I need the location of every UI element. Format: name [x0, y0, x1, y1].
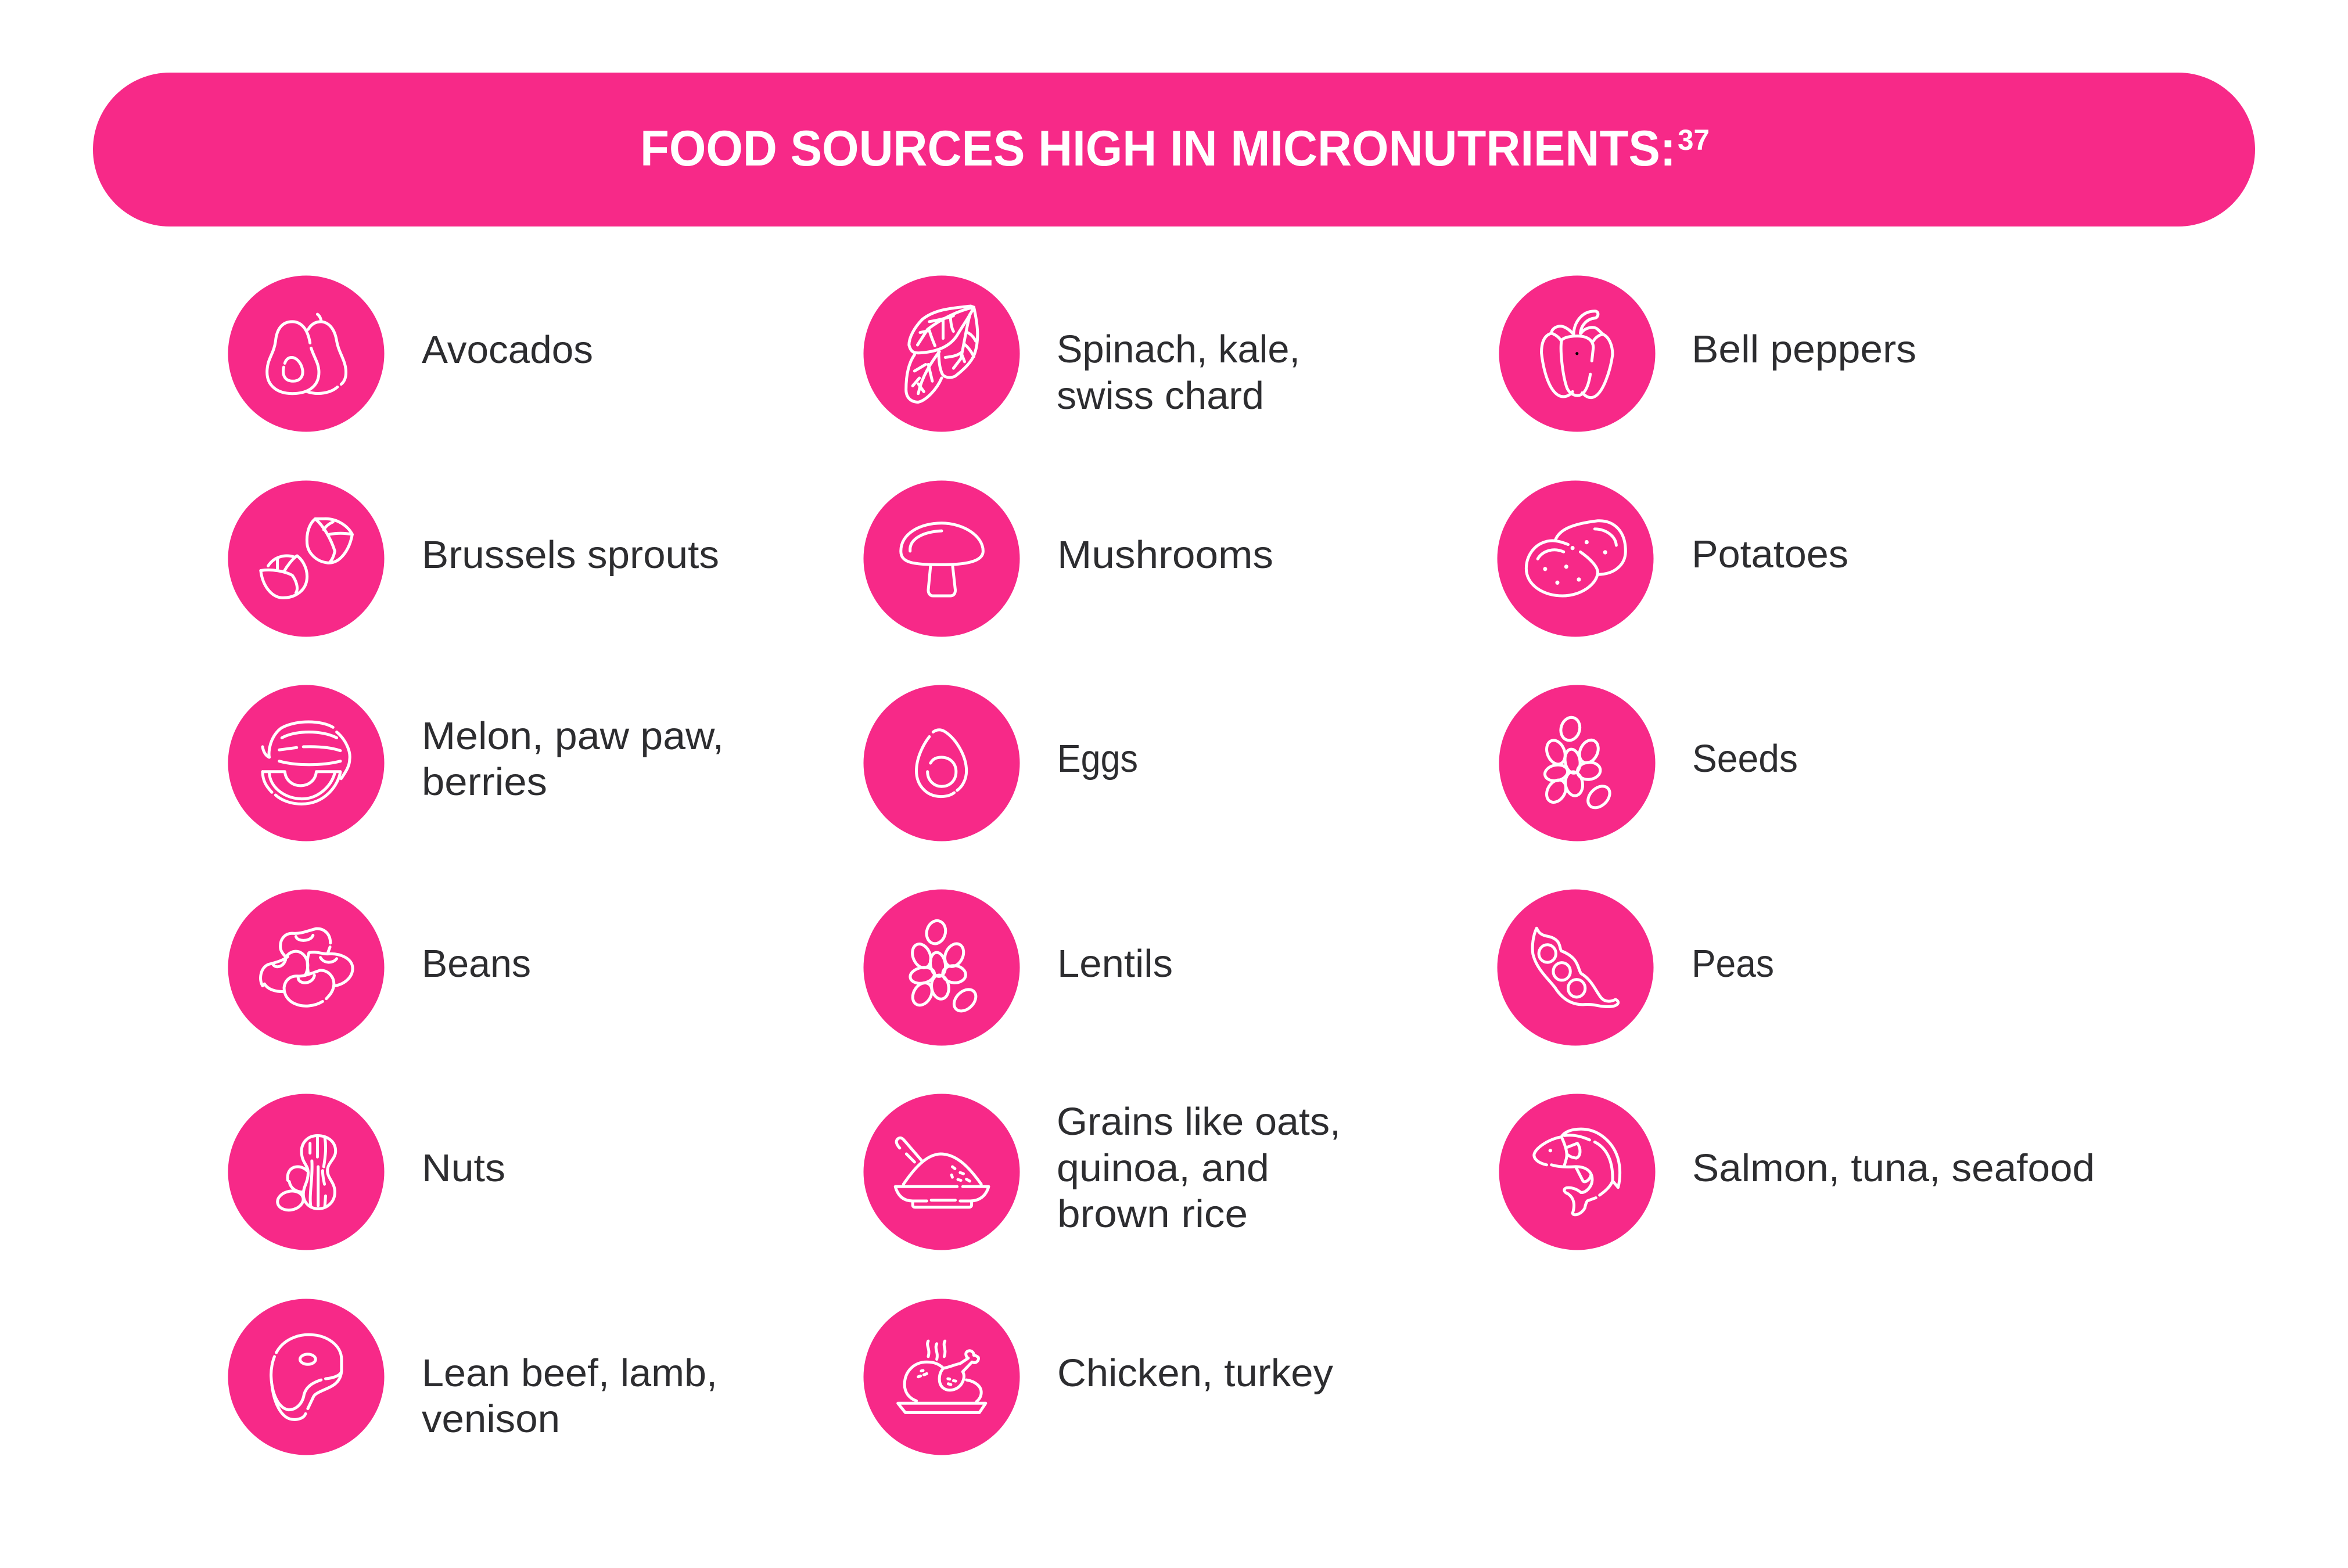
- icon: bell pepper: [1542, 311, 1613, 398]
- icon: brussels sprouts: [261, 519, 352, 598]
- item: Avocados: Avocados: [422, 328, 593, 372]
- item: Brussels sprouts: Brussels sprouts: [422, 533, 719, 577]
- item: Lean beef, lamb, venison: venison: [422, 1397, 560, 1441]
- item: Lentils: [863, 890, 1173, 1045]
- banner: title: FOOD SOURCES HIGH IN MICRONUTRIENTS:: [640, 121, 1676, 177]
- item: Grains like oats, quinoa, and brown rice: quinoa, and: [1057, 1146, 1269, 1190]
- item: Mushrooms: [863, 481, 1273, 636]
- item: Salmon, tuna, seafood: [1499, 1094, 2095, 1250]
- item: Brussels sprouts: [228, 481, 719, 636]
- icon: seeds: [1543, 714, 1614, 812]
- icon: beans: [261, 929, 353, 1006]
- icon: leaves: [906, 306, 978, 402]
- icon: grain bowl: [895, 1138, 989, 1207]
- icon: lentils: [909, 918, 980, 1015]
- item: Seeds: [1499, 685, 1798, 841]
- icon: melon: [263, 722, 350, 804]
- banner: title: [93, 73, 2255, 226]
- item: Nuts: Nuts: [422, 1146, 505, 1190]
- item: Salmon, tuna, seafood: Salmon, tuna, seafood: [1692, 1146, 2095, 1190]
- item: Beans: [228, 890, 531, 1045]
- item: Eggs: [863, 685, 1138, 841]
- icon: fish: [1534, 1129, 1620, 1215]
- item: Lentils: Lentils: [1057, 942, 1173, 986]
- icon: potatoes: [1526, 521, 1625, 596]
- icon: peanuts: [276, 1135, 336, 1212]
- icon: egg: [917, 730, 967, 797]
- item: Peas: Peas: [1692, 942, 1774, 986]
- item: Eggs: Eggs: [1057, 737, 1138, 781]
- item: Grains like oats, quinoa, and brown rice: Grains like oats,: [1057, 1100, 1341, 1143]
- item: Chicken, turkey: [863, 1299, 1334, 1455]
- item: Lean beef, lamb, venison: [228, 1299, 717, 1455]
- item: Grains like oats, quinoa, and brown rice: [863, 1094, 1341, 1250]
- item: Potatoes: Potatoes: [1692, 533, 1848, 576]
- item: Melon, paw paw, berries: [228, 685, 724, 841]
- item: Potatoes: [1498, 481, 1848, 636]
- icon: roast chicken: [898, 1341, 986, 1412]
- item: Nuts: [228, 1094, 505, 1250]
- item: Bell peppers: [1499, 275, 1916, 432]
- item: Beans: Beans: [422, 942, 531, 986]
- item: Spinach, kale, swiss chard: swiss chard: [1057, 374, 1264, 418]
- icon: steak: [271, 1335, 342, 1419]
- item: Mushrooms: Mushrooms: [1057, 533, 1273, 577]
- icon: pea pod: [1532, 928, 1618, 1007]
- item: Melon, paw paw, berries: Melon, paw paw,: [422, 714, 724, 758]
- icon: mushroom: [901, 523, 983, 596]
- item: Spinach, kale, swiss chard: [863, 275, 1300, 432]
- item: Spinach, kale, swiss chard: Spinach, kale,: [1057, 328, 1300, 371]
- item: Peas: [1498, 890, 1774, 1045]
- banner: title: 37: [1678, 124, 1710, 156]
- item: Seeds: Seeds: [1692, 737, 1798, 781]
- item: Avocados: [228, 275, 593, 432]
- item: Bell peppers: Bell peppers: [1692, 328, 1916, 371]
- item: Melon, paw paw, berries: berries: [422, 760, 547, 804]
- item: Chicken, turkey: Chicken, turkey: [1057, 1351, 1334, 1395]
- item: Grains like oats, quinoa, and brown rice: brown rice: [1057, 1192, 1248, 1236]
- item: Lean beef, lamb, venison: Lean beef, lamb,: [422, 1351, 717, 1395]
- icon: avocados: [267, 314, 346, 394]
